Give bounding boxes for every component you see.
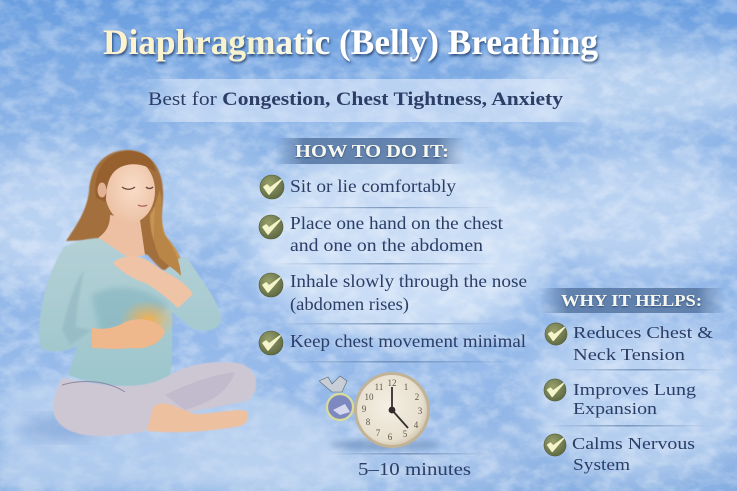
heading: why it helps: WHY IT HELPS: xyxy=(561,291,702,310)
step: keep chest minimal: Keep chest movement minimal xyxy=(290,331,526,351)
woman meditating xyxy=(0,150,370,491)
forearm and hand on abdomen xyxy=(92,319,165,349)
benefit: reduces tension: Reduces Chest & xyxy=(573,323,713,342)
step: inhale xyxy=(259,271,527,314)
icon: clock: 4 xyxy=(414,420,419,430)
step: place hands xyxy=(259,213,503,255)
icon: clock: 6 xyxy=(388,432,393,442)
icon: clock: 7 xyxy=(376,428,381,438)
icon: clock: 5 xyxy=(403,429,408,439)
ear xyxy=(98,182,106,198)
benefit: calms nervous system xyxy=(544,434,695,474)
seat shadow xyxy=(20,414,100,442)
icon: clock: 3 xyxy=(418,406,423,416)
hair highlights xyxy=(150,195,184,280)
forearm and hand on chest xyxy=(113,256,193,308)
step: keep chest minimal xyxy=(259,331,526,355)
pants and crossed legs xyxy=(53,362,256,436)
pants fold shading xyxy=(165,372,235,410)
step: place hands: Place one hand on the chest xyxy=(290,213,503,233)
face xyxy=(105,159,155,223)
stopwatch knob xyxy=(319,376,347,392)
bare foot xyxy=(147,403,248,432)
divider above duration xyxy=(325,453,490,454)
panel: how to do it xyxy=(259,138,527,362)
cloud seat beneath the woman xyxy=(0,378,370,491)
step: place hands: and one on the abdomen xyxy=(290,235,483,255)
panel: why it helps xyxy=(540,288,725,474)
duration label: 5–10 minutes xyxy=(358,459,471,479)
hair back xyxy=(66,150,184,282)
neck and upper chest xyxy=(98,215,145,258)
subtitle band: Best for Congestion, Chest Tightness, Anxiety xyxy=(148,90,564,110)
benefit: reduces tension: Neck Tension xyxy=(573,345,686,364)
icon: clock: 9 xyxy=(362,404,367,414)
subtitle band xyxy=(135,79,595,122)
heading: why it helps xyxy=(540,288,725,313)
closed eyes and mouth xyxy=(122,187,153,206)
step: inhale: (abdomen rises) xyxy=(290,294,409,314)
benefit: calms nervous system: Calms Nervous xyxy=(572,434,695,453)
abdomen glow xyxy=(120,300,176,340)
step: sit or lie: Sit or lie comfortably xyxy=(290,176,456,196)
icon: clock: 2 xyxy=(415,392,419,402)
hair top and side xyxy=(95,151,155,202)
benefit: reduces tension xyxy=(545,323,713,364)
front hair lock xyxy=(154,190,181,276)
title: Diaphragmatic (Belly) Breathing xyxy=(103,22,598,62)
small ring xyxy=(327,394,353,420)
sleeve shading xyxy=(62,270,92,345)
benefit: calms nervous system: System xyxy=(573,455,630,474)
icon: clock xyxy=(319,372,440,451)
icon: clock: 12 xyxy=(388,378,396,388)
icon: clock: 8 xyxy=(366,417,371,427)
benefit: lung expansion xyxy=(544,379,697,418)
step: sit or lie xyxy=(260,175,456,199)
shirt with left arm and torso xyxy=(39,238,221,386)
benefit: lung expansion: Expansion xyxy=(573,399,658,418)
benefit: lung expansion: Improves Lung xyxy=(573,380,697,399)
step: inhale: Inhale slowly through the nose xyxy=(290,271,527,291)
icon: clock: 1 xyxy=(404,382,408,392)
torso shading xyxy=(92,288,168,335)
icon: clock: 10 xyxy=(364,392,374,402)
icon: clock: 11 xyxy=(375,382,383,392)
heading: how to do it: HOW TO DO IT: xyxy=(295,141,449,161)
heading: how to do it xyxy=(275,138,465,164)
